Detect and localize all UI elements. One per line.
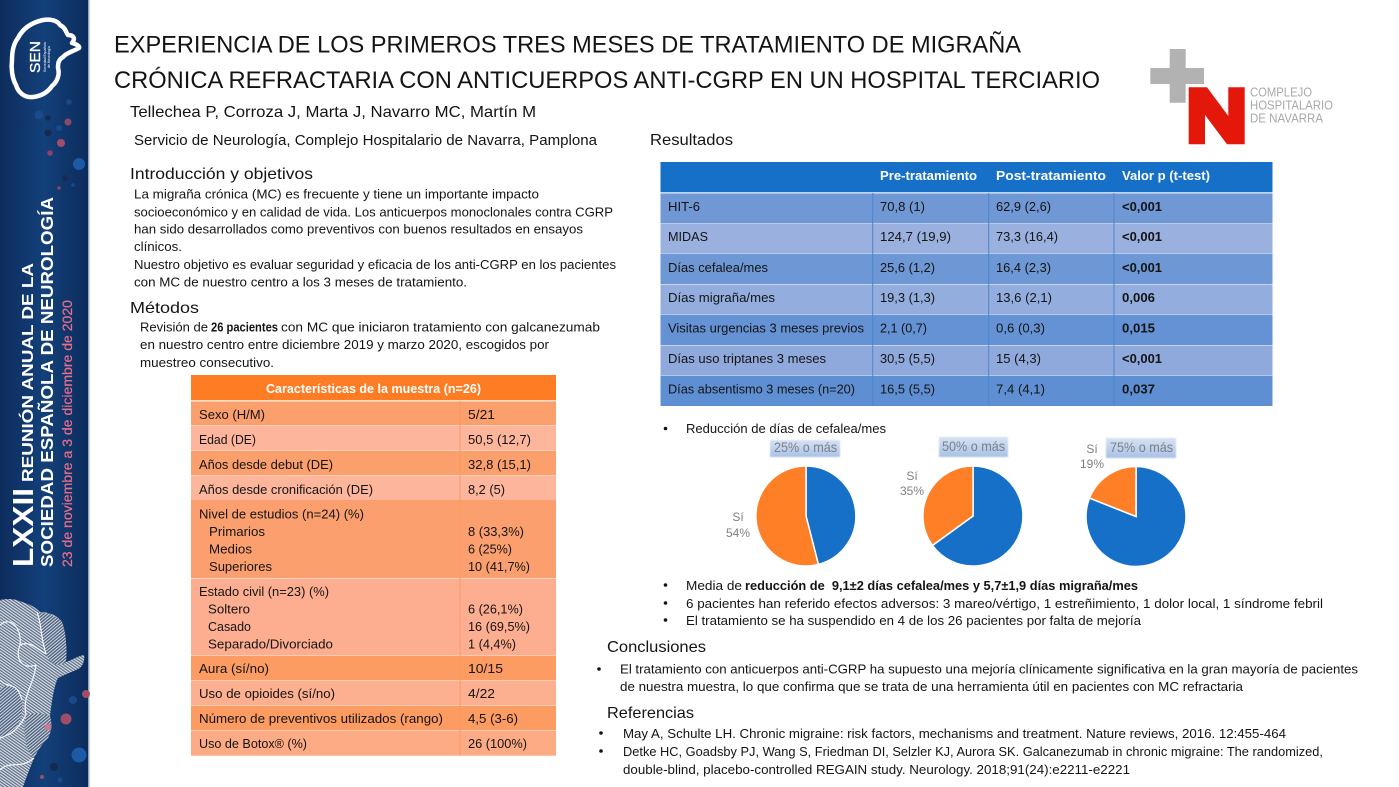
heading: reunion anual: REUNIÓN ANUAL DE LA — [18, 262, 37, 482]
table: results: 73,3 (16,4) — [996, 229, 1058, 244]
table: results — [660, 162, 1272, 406]
table: results: 25,6 (1,2) — [880, 260, 935, 275]
icon: wireframe brain — [0, 599, 84, 787]
table: sample characteristics: Años desde debut (DE) — [199, 457, 333, 472]
bullet: reduccion heading: Reducción de días de cefalea/mes — [686, 421, 886, 436]
table: sample characteristics: 50,5 (12,7) — [468, 432, 531, 447]
heading: LXXII: LXXII — [8, 488, 40, 567]
icon: SEN logo: SEN — [27, 41, 44, 73]
table: sample characteristics: 6 (25%) — [468, 542, 512, 556]
pie chart: 50% o mas: 50% o más — [942, 438, 1005, 454]
text block: metodos: muestreo consecutivo. — [140, 355, 274, 370]
text block: conclusiones: de nuestra muestra, lo que confirma que se trata de una herramienta útil en pacientes con MC refractaria — [620, 679, 1244, 694]
icon: hospital logo: HOSPITALARIO — [1250, 99, 1333, 113]
table: sample characteristics: 1 (4,4%) — [468, 636, 516, 652]
text block: introduccion: han sido desarrollados como preventivos con buenos resultados en ensayos — [134, 222, 584, 236]
text block: referencias: May A, Schulte LH. Chronic migraine: risk factors, mechanisms and treatment. Nature reviews, 2016. 12:455-464 — [623, 726, 1286, 741]
pie chart: 50% o mas — [900, 437, 1023, 566]
pie chart: 75% o mas — [1080, 438, 1186, 566]
table: sample characteristics: 8 (33,3%) — [468, 524, 524, 539]
icon: SEN logo: de Neurología — [47, 46, 51, 68]
pie chart: 25% o mas: 25% o más — [774, 439, 837, 455]
icon: hospital logo: COMPLEJO — [1250, 86, 1312, 100]
table: results: Días cefalea/mes — [668, 260, 768, 275]
title: CRÓNICA REFRACTARIA CON ANTICUERPOS ANTI-CGRP EN UN HOSPITAL TERCIARIO — [114, 67, 1100, 94]
pie chart: 50% o mas: 35% — [900, 484, 924, 498]
icon: SEN logo — [12, 20, 79, 97]
congress dates: 23 de noviembre a 3 de diciembre de 2020 — [59, 300, 75, 567]
table: results: 0,006 — [1122, 290, 1155, 305]
decorative dots upper — [34, 99, 85, 190]
pie chart: 50% o mas: Sí — [906, 469, 918, 483]
text block: introduccion: con MC de nuestro centro a los 3 meses de tratamiento. — [134, 274, 467, 290]
bullet list: results summary: Media de — [686, 578, 742, 593]
table: sample characteristics: Años desde cronificación (DE) — [199, 482, 373, 497]
table: sample characteristics — [191, 375, 556, 756]
table: sample characteristics: 4/22 — [468, 686, 495, 701]
table: sample characteristics: 8,2 (5) — [468, 482, 505, 497]
table: sample characteristics: Edad (DE) — [199, 432, 256, 447]
table: results: 0,037 — [1122, 382, 1155, 396]
text block: introduccion: clínicos. — [134, 239, 182, 254]
table: results: 19,3 (1,3) — [880, 290, 935, 305]
text block: conclusiones — [597, 662, 1359, 694]
text block: metodos — [140, 320, 600, 370]
table: sample characteristics: 32,8 (15,1) — [468, 457, 531, 472]
text block: introduccion — [134, 186, 616, 290]
table: results: 15 (4,3) — [996, 351, 1041, 366]
table: results: 0,015 — [1122, 320, 1155, 336]
pie chart: 25% o mas: 54% — [726, 526, 750, 540]
text block: conclusiones: El tratamiento con anticuerpos anti-CGRP ha supuesto una mejoría clínicamente significativa en la gran mayoría de pacientes — [620, 662, 1359, 676]
text block: introduccion: socioeconómico y en calidad de vida. Los anticuerpos monoclonales contra CGRP — [134, 204, 613, 220]
table: results: Visitas urgencias 3 meses previos — [668, 320, 864, 336]
bullet list: results summary — [664, 578, 1323, 628]
heading: conclusiones: Conclusiones — [607, 639, 706, 656]
table: sample characteristics: 26 (100%) — [468, 736, 527, 751]
table: sample characteristics: Sexo (H/M) — [199, 407, 265, 422]
pie chart: 75% o mas: 75% o más — [1110, 439, 1173, 455]
table: results: 62,9 (2,6) — [996, 199, 1051, 214]
table: sample characteristics: Superiores — [209, 559, 272, 574]
heading: metodos: Métodos — [130, 300, 199, 317]
table: sample characteristics: 10/15 — [468, 661, 503, 676]
text block: referencias: double-blind, placebo-controlled REGAIN study. Neurology. 2018;91(24):e2211-e2221 — [623, 762, 1130, 777]
table: results: MIDAS — [668, 229, 708, 244]
table: sample characteristics: Estado civil (n=23) (%) — [199, 584, 329, 599]
authors: Tellechea P, Corroza J, Marta J, Navarro MC, Martín M — [130, 104, 536, 121]
bullet list: results summary: reducción de 9,1±2 días cefalea/mes y 5,7±1,9 días migraña/mes — [745, 578, 1138, 593]
table: results: Días uso triptanes 3 meses — [668, 351, 826, 366]
affiliation: Servicio de Neurología, Complejo Hospitalario de Navarra, Pamplona — [134, 133, 598, 149]
text block: metodos: 26 pacientes — [211, 320, 278, 334]
table: sample characteristics: Primarios — [209, 524, 265, 539]
table: sample characteristics: 6 (26,1%) — [468, 602, 523, 616]
heading: referencias: Referencias — [607, 705, 694, 722]
table: results: 30,5 (5,5) — [880, 351, 935, 366]
table: results: HIT-6 — [668, 199, 700, 214]
table: results: 0,6 (0,3) — [996, 320, 1045, 336]
table: sample characteristics: Aura (sí/no) — [199, 661, 269, 676]
icon: hospital logo: DE NAVARRA — [1250, 112, 1324, 126]
table: results: 124,7 (19,9) — [880, 229, 951, 244]
table: sample characteristics: Nivel de estudios (n=24) (%) — [199, 506, 364, 522]
table: results: Pre-tratamiento — [880, 168, 977, 183]
pie chart: 25% o mas: Sí — [732, 510, 744, 524]
table: results: Días absentismo 3 meses (n=20) — [668, 382, 855, 396]
bullet list: results summary: 6 pacientes han referido efectos adversos: 3 mareo/vértigo, 1 estreñimiento, 1 dolor local, 1 síndrome febril — [686, 596, 1323, 611]
title: EXPERIENCIA DE LOS PRIMEROS TRES MESES DE TRATAMIENTO DE MIGRAÑA — [114, 32, 1021, 58]
table: sample characteristics: 4,5 (3-6) — [468, 711, 518, 726]
text block: metodos: Revisión de — [140, 320, 208, 334]
text block: referencias: Detke HC, Goadsby PJ, Wang S, Friedman DI, Selzler KJ, Aurora SK. Galcanezumab in chronic migraine: The randomized, — [623, 744, 1323, 759]
table: sample characteristics: Medios — [209, 542, 252, 556]
table: sample characteristics: Casado — [208, 619, 251, 634]
title — [114, 32, 1100, 94]
sidebar banner — [0, 0, 90, 787]
table: sample characteristics: Uso de opioides (sí/no) — [199, 686, 335, 701]
text block: referencias — [599, 726, 1323, 777]
table: results: <0,001 — [1122, 351, 1162, 366]
table: sample characteristics: Separado/Divorciado — [208, 636, 333, 652]
pie chart: 25% o mas — [726, 439, 856, 566]
table: results: 2,1 (0,7) — [880, 320, 927, 336]
heading: resultados: Resultados — [650, 132, 733, 149]
pie chart: 75% o mas: Sí — [1086, 442, 1098, 456]
table: sample characteristics: Número de preventivos utilizados (rango) — [199, 711, 443, 726]
text block: introduccion: Nuestro objetivo es evaluar seguridad y eficacia de los anti-CGRP en los pacientes — [134, 257, 616, 272]
heading: sociedad: SOCIEDAD ESPAÑOLA DE NEUROLOGÍA — [36, 197, 57, 567]
text block: metodos: en nuestro centro entre diciembre 2019 y marzo 2020, escogidos por — [140, 337, 550, 352]
table: sample characteristics: Características de la muestra (n=26) — [266, 381, 481, 396]
table: results: <0,001 — [1122, 199, 1162, 214]
table: results: Post-tratamiento — [996, 168, 1106, 183]
table: results: <0,001 — [1122, 229, 1162, 244]
table: sample characteristics: Soltero — [208, 602, 250, 616]
table: sample characteristics: 16 (69,5%) — [468, 619, 530, 634]
table: results: 70,8 (1) — [880, 199, 925, 214]
table: results: Días migraña/mes — [668, 290, 776, 305]
pie chart: 75% o mas: 19% — [1080, 457, 1104, 471]
icon: SEN logo: Sociedad Española — [43, 42, 47, 72]
text block: metodos: con MC que iniciaron tratamiento con galcanezumab — [281, 320, 600, 334]
table: results: <0,001 — [1122, 260, 1162, 275]
table: results: 13,6 (2,1) — [996, 290, 1052, 305]
table: sample characteristics: Uso de Botox® (%) — [199, 736, 307, 751]
decorative dots lower — [40, 690, 90, 783]
heading: introduccion: Introducción y objetivos — [130, 166, 313, 183]
text block: introduccion: La migraña crónica (MC) es frecuente y tiene un importante impacto — [134, 186, 539, 202]
table: sample characteristics: 5/21 — [468, 407, 495, 422]
table: results: 7,4 (4,1) — [996, 382, 1045, 396]
bullet list: results summary: El tratamiento se ha suspendido en 4 de los 26 pacientes por falta de mejoría — [686, 613, 1142, 628]
table: sample characteristics: 10 (41,7%) — [468, 559, 530, 574]
table: results: 16,4 (2,3) — [996, 260, 1051, 275]
icon: hospital logo — [1150, 49, 1333, 144]
table: results: Valor p (t-test) — [1122, 168, 1210, 183]
table: results: 16,5 (5,5) — [880, 382, 935, 396]
